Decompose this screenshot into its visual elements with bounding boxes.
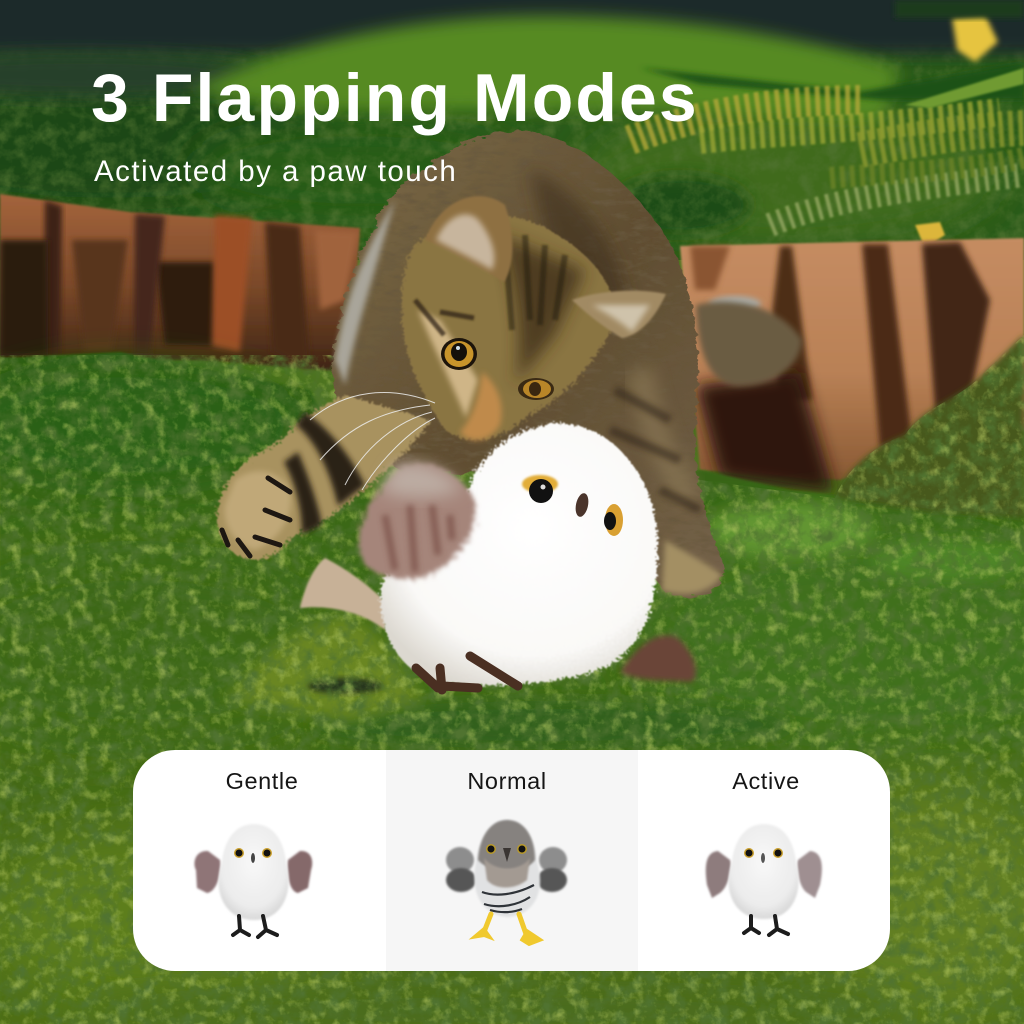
owl near eye (522, 475, 558, 503)
owl beak (574, 492, 590, 518)
cat foreleg and paw (217, 395, 430, 560)
owl wing (359, 463, 476, 579)
panel: flapping mode comparison (133, 750, 890, 971)
cat eyes (441, 338, 554, 400)
cat body (332, 130, 726, 596)
owl far wing (620, 635, 696, 682)
cat (217, 130, 802, 596)
owl far eye (604, 504, 623, 536)
subtitle: Activated by a paw touch (94, 155, 457, 188)
cat tail (696, 302, 802, 386)
icon: gentle owl (194, 824, 312, 937)
log: left section (0, 194, 360, 372)
icon: active owl (706, 824, 822, 935)
background: distant foliage (0, 0, 1024, 260)
label: Active: Active (732, 768, 800, 794)
mode illustrations (193, 818, 824, 946)
title: 3 Flapping Modes (91, 60, 699, 136)
cat whiskers (310, 393, 435, 490)
ferns (630, 100, 1024, 225)
dark shadow beside owl feet (307, 678, 383, 694)
cat left ear (425, 196, 512, 282)
middle column background (386, 750, 638, 971)
label: Gentle: Gentle (226, 768, 298, 794)
cat head (402, 215, 615, 440)
log: right section (680, 238, 1024, 495)
moss mound under owl (225, 615, 425, 722)
cat right ear (572, 291, 666, 338)
owl tail feather (300, 558, 388, 630)
moss ground (0, 330, 1024, 1024)
owl body (380, 423, 657, 685)
icon: normal owl (446, 820, 567, 945)
moss mound at right (835, 335, 1024, 518)
owl toy (300, 423, 696, 690)
owl feet (416, 656, 518, 690)
label: Normal: Normal (467, 768, 547, 794)
